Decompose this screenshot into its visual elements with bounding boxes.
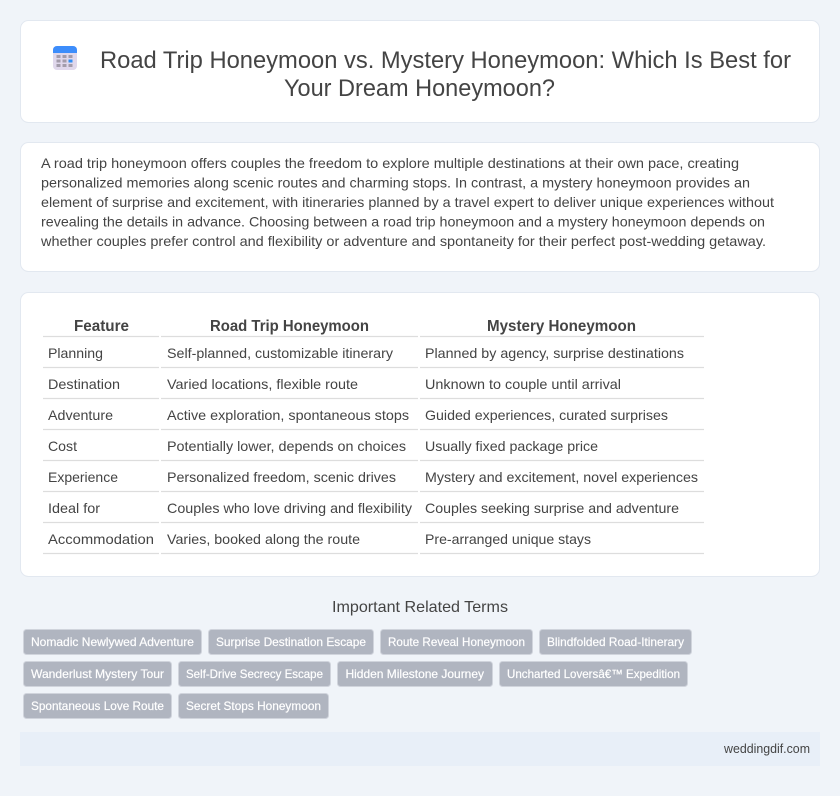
tag: secret stops honeymoon: Secret Stops Honeymoon xyxy=(186,699,321,713)
table row: ideal for: Couples seeking surprise and adventure xyxy=(425,500,679,516)
table row: destination xyxy=(43,376,704,398)
table header: Mystery Honeymoon xyxy=(487,318,636,335)
tag: spontaneous love route xyxy=(24,694,172,718)
table row: planning: Planned by agency, surprise destinations xyxy=(425,345,684,361)
table row: ideal for xyxy=(43,500,704,522)
tag: self-drive secrecy escape xyxy=(178,662,330,686)
title: Your Dream Honeymoon? xyxy=(284,75,555,102)
table row: adventure: Adventure xyxy=(48,407,113,423)
tag: wanderlust mystery tour: Wanderlust Mystery Tour xyxy=(31,667,164,681)
table header xyxy=(43,318,704,336)
tag: hidden milestone journey: Hidden Milestone Journey xyxy=(346,667,484,681)
text block: introduction paragraph: whether couples prefer control and flexibility or adventure and spontaneity for their perfect post-wedding getaway. xyxy=(40,233,766,249)
tag: nomadic newlywed adventure xyxy=(24,630,202,654)
table row: ideal for: Ideal for xyxy=(48,500,100,516)
table row: cost xyxy=(43,438,704,460)
table row: experience: Mystery and excitement, novel experiences xyxy=(425,469,698,485)
table row: cost: Usually fixed package price xyxy=(425,438,598,454)
tag: route reveal honeymoon xyxy=(380,630,532,654)
tag: self-drive secrecy escape: Self-Drive Secrecy Escape xyxy=(186,667,323,681)
panel: comparison table xyxy=(20,292,820,576)
tag: blindfolded road-itinerary: Blindfolded Road-Itinerary xyxy=(547,635,684,649)
table row: planning: Self-planned, customizable itinerary xyxy=(167,345,393,361)
tag: surprise destination escape: Surprise Destination Escape xyxy=(216,635,366,649)
table row: experience xyxy=(43,469,704,492)
table header: Road Trip Honeymoon xyxy=(210,318,369,335)
table row: planning: Planning xyxy=(48,345,103,361)
tag: blindfolded road-itinerary xyxy=(540,630,692,654)
table row: accommodation: Accommodation xyxy=(48,531,154,547)
tag: spontaneous love route: Spontaneous Love Route xyxy=(31,699,164,713)
tag: uncharted lovers expedition xyxy=(500,662,688,686)
tag: hidden milestone journey xyxy=(338,662,492,686)
table row: destination: Destination xyxy=(48,376,120,392)
table row: destination: Unknown to couple until arrival xyxy=(425,376,621,392)
table row: destination: Varied locations, flexible route xyxy=(167,376,358,392)
table row: ideal for: Couples who love driving and flexibility xyxy=(167,500,412,516)
footer xyxy=(20,732,820,766)
footer: weddingdif.com xyxy=(723,741,810,756)
table row: adventure: Active exploration, spontaneous stops xyxy=(167,407,409,423)
text block: introduction paragraph xyxy=(40,155,774,249)
text block: introduction paragraph: revealing the details in advance. Choosing between a road trip honeymoon and a mystery honeymoon depends on xyxy=(41,214,765,230)
text block: introduction paragraph: personalized memories along scenic routes and charming stops. In contrast, a mystery honeymoon provides an xyxy=(41,175,750,191)
table row: experience: Experience xyxy=(48,469,118,485)
table row: accommodation: Pre-arranged unique stays xyxy=(425,531,591,547)
table row: adventure: Guided experiences, curated surprises xyxy=(425,407,668,423)
tag: uncharted lovers expedition: Uncharted Loversâ€™ Expedition xyxy=(507,667,680,681)
table row: accommodation: Varies, booked along the route xyxy=(167,531,360,547)
table row: adventure xyxy=(43,407,704,430)
table row: experience: Personalized freedom, scenic drives xyxy=(167,469,396,485)
title xyxy=(100,47,791,102)
tag: wanderlust mystery tour xyxy=(24,662,172,686)
table row: accommodation xyxy=(43,531,704,554)
panel: introduction xyxy=(20,142,820,272)
tag: route reveal honeymoon: Route Reveal Honeymoon xyxy=(388,635,525,649)
icon: calendar xyxy=(53,46,77,70)
tag: surprise destination escape xyxy=(208,630,374,654)
table row: cost: Cost xyxy=(48,438,77,454)
table row: planning xyxy=(43,345,704,368)
text block: introduction paragraph: A road trip honeymoon offers couples the freedom to explore multiple destinations at their own pace, creating xyxy=(41,155,739,171)
panel: header xyxy=(20,20,820,122)
tag: secret stops honeymoon xyxy=(178,694,328,718)
related term tags xyxy=(24,630,692,718)
title: Road Trip Honeymoon vs. Mystery Honeymoon: Which Is Best for xyxy=(100,47,791,74)
table header: Feature xyxy=(74,318,129,335)
table row: cost: Potentially lower, depends on choices xyxy=(167,438,406,454)
text block: introduction paragraph: element of surprise and excitement, with itineraries planned by a travel expert to deliver unique experiences without xyxy=(41,194,774,210)
tag: nomadic newlywed adventure: Nomadic Newlywed Adventure xyxy=(31,635,194,649)
heading: related terms: Important Related Terms xyxy=(332,599,508,616)
